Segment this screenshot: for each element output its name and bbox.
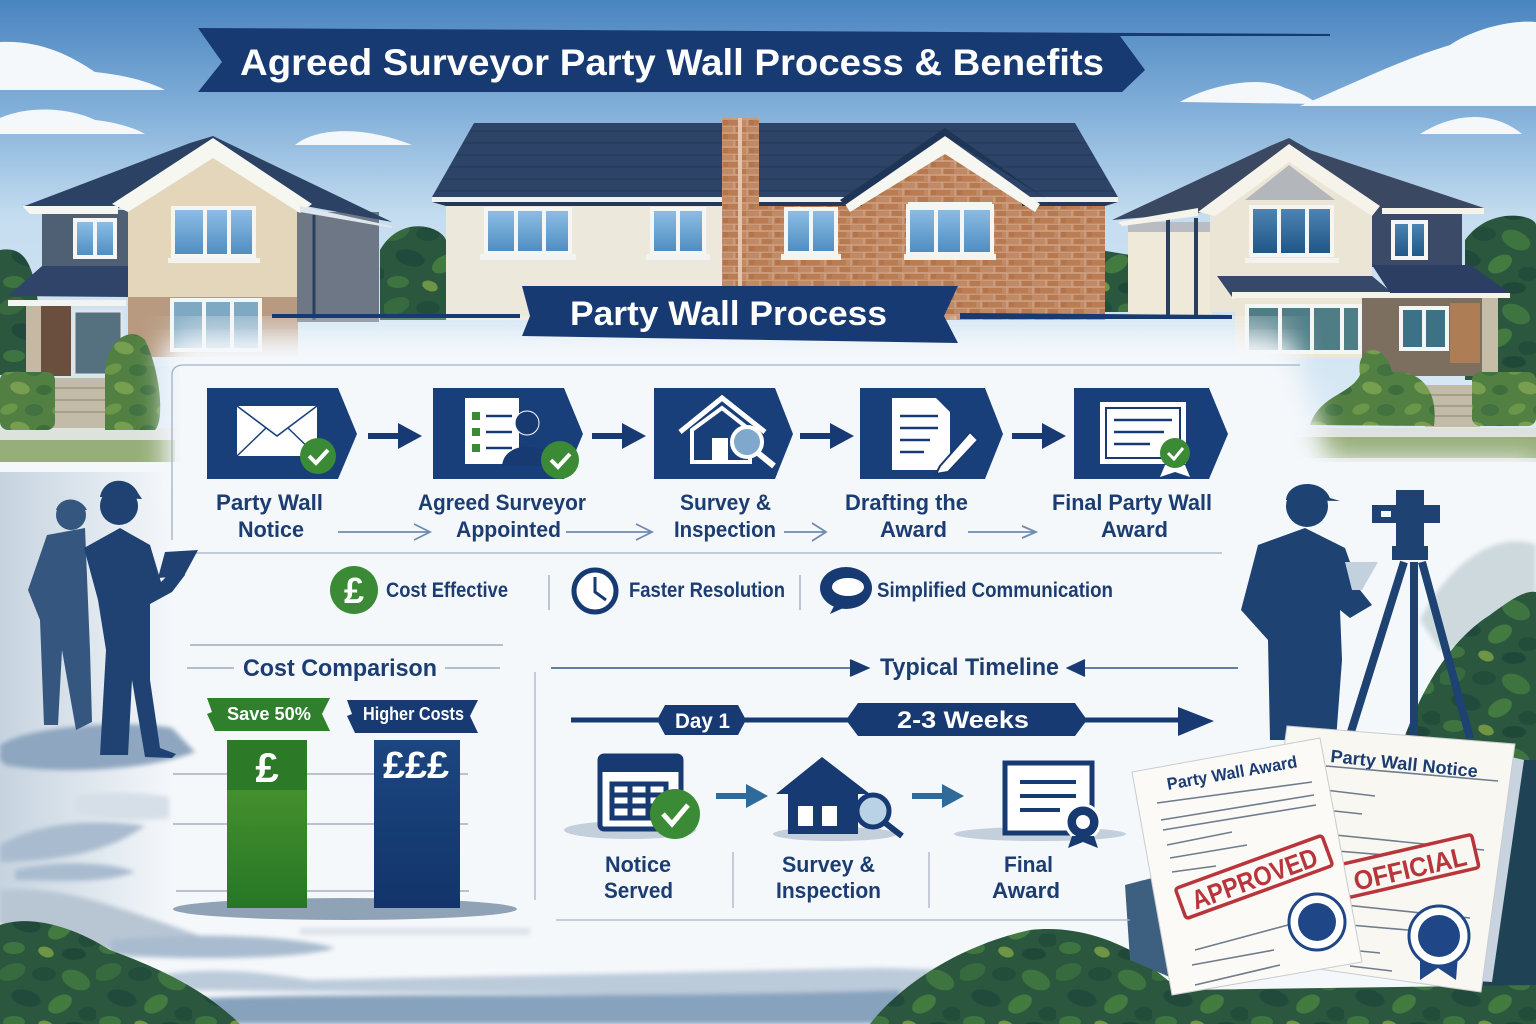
heading: Cost Comparison: Cost Comparison: [243, 655, 437, 682]
section banner: Party Wall Process: Party Wall Process: [570, 295, 887, 333]
step 4: Drafting the Award: Drafting the: [845, 490, 968, 515]
benefit: Cost Effective: £: [344, 570, 364, 611]
document: Party Wall Award: Party Wall Award: [1165, 752, 1299, 794]
seal: [1289, 894, 1345, 950]
ground brush strokes: [0, 793, 1130, 1024]
benefit: Simplified Communication: [820, 567, 1113, 614]
stamp: OFFICIAL: OFFICIAL: [1351, 841, 1470, 897]
benefit: Faster Resolution: Faster Resolution: [629, 579, 785, 602]
arrow: [1012, 423, 1066, 449]
stamp: APPROVED: APPROVED: [1188, 842, 1322, 916]
arrow: [592, 423, 646, 449]
timeline step: Notice Served: Served: [604, 878, 673, 903]
house: right: [1112, 138, 1536, 427]
title banner: Agreed Surveyor Party Wall Process & Benefits: [240, 41, 1104, 83]
document: Party Wall Notice: Party Wall Notice: [1330, 746, 1479, 781]
step 2: Agreed Surveyor Appointed: [418, 388, 586, 542]
chart: cost comparison bars: £££: [383, 745, 449, 787]
heading: Typical Timeline: [551, 654, 1238, 681]
bushes: bottom: [0, 872, 1536, 1024]
seal: [1409, 906, 1469, 980]
timeline arrow: 2-3 Weeks: [897, 707, 1029, 734]
timeline step: Final Award: Award: [992, 878, 1060, 903]
step 3: Survey & Inspection: [654, 388, 793, 542]
title banner: [198, 28, 1330, 92]
step 2: Agreed Surveyor Appointed: Agreed Surveyor: [418, 490, 586, 515]
sky background: [0, 0, 1536, 520]
document: Party Wall Notice: [1255, 726, 1524, 992]
benefit: Faster Resolution: [574, 570, 785, 612]
step 4: Drafting the Award: [845, 388, 1003, 542]
step 3: Survey & Inspection: Inspection: [674, 517, 776, 542]
heading: Cost Comparison: [187, 645, 503, 682]
label: Save 50%: [207, 698, 330, 731]
timeline step: Survey & Inspection: [773, 757, 902, 903]
arrow: [912, 784, 964, 808]
step 5: Final Party Wall Award: [1052, 388, 1228, 542]
timeline step: Notice Served: [564, 756, 700, 903]
chart: cost comparison bars: [173, 698, 517, 920]
arrow: [800, 423, 854, 449]
arrow: [716, 784, 768, 808]
timeline step: Final Award: [954, 763, 1126, 903]
clouds: [0, 22, 1536, 145]
step 1: Party Wall Notice: [207, 388, 357, 542]
step 4: Drafting the Award: Award: [880, 517, 947, 542]
timeline arrow: Day 1: [675, 710, 730, 733]
benefit: Simplified Communication: Simplified Communication: [877, 579, 1113, 602]
document: Party Wall Award: [1132, 738, 1362, 995]
trees behind houses: [0, 216, 1536, 380]
ground shadow left: [0, 724, 195, 770]
house: left: [0, 136, 392, 430]
benefit: Cost Effective: [330, 566, 508, 614]
heading: Typical Timeline: Typical Timeline: [880, 654, 1059, 681]
label: Higher Costs: Higher Costs: [363, 704, 464, 724]
panel frame line: [172, 365, 1300, 553]
step 5: Final Party Wall Award: Award: [1101, 517, 1168, 542]
arrow: [368, 423, 422, 449]
house: centre brick: [432, 118, 1118, 320]
label: Higher Costs: [347, 700, 478, 733]
timeline step: Survey & Inspection: Survey &: [782, 852, 875, 877]
pale page background: [0, 316, 1536, 1024]
silhouette: two surveyors: [28, 481, 198, 758]
chart: cost comparison bars: £: [255, 744, 279, 791]
tripod and surveying instrument: [1350, 490, 1470, 738]
step 5: Final Party Wall Award: Final Party Wall: [1052, 490, 1212, 515]
label: Save 50%: Save 50%: [227, 704, 311, 724]
benefit: Cost Effective: Cost Effective: [386, 579, 508, 602]
step 3: Survey & Inspection: Survey &: [680, 490, 771, 515]
right-side foliage: [1400, 541, 1536, 1024]
ground strip: [0, 428, 1536, 474]
silhouette: surveyor: [1241, 484, 1378, 740]
timeline step: Notice Served: Notice: [605, 852, 671, 877]
step 2: Agreed Surveyor Appointed: Appointed: [456, 517, 561, 542]
timeline step: Final Award: Final: [1004, 852, 1053, 877]
step 1: Party Wall Notice: Party Wall: [216, 490, 323, 515]
step 1: Party Wall Notice: Notice: [238, 517, 304, 542]
section banner: Party Wall Process: [272, 286, 1232, 343]
thin flow arrows under labels: [338, 523, 1036, 541]
timeline arrow: [571, 703, 1214, 736]
timeline step: Survey & Inspection: Inspection: [776, 878, 881, 903]
